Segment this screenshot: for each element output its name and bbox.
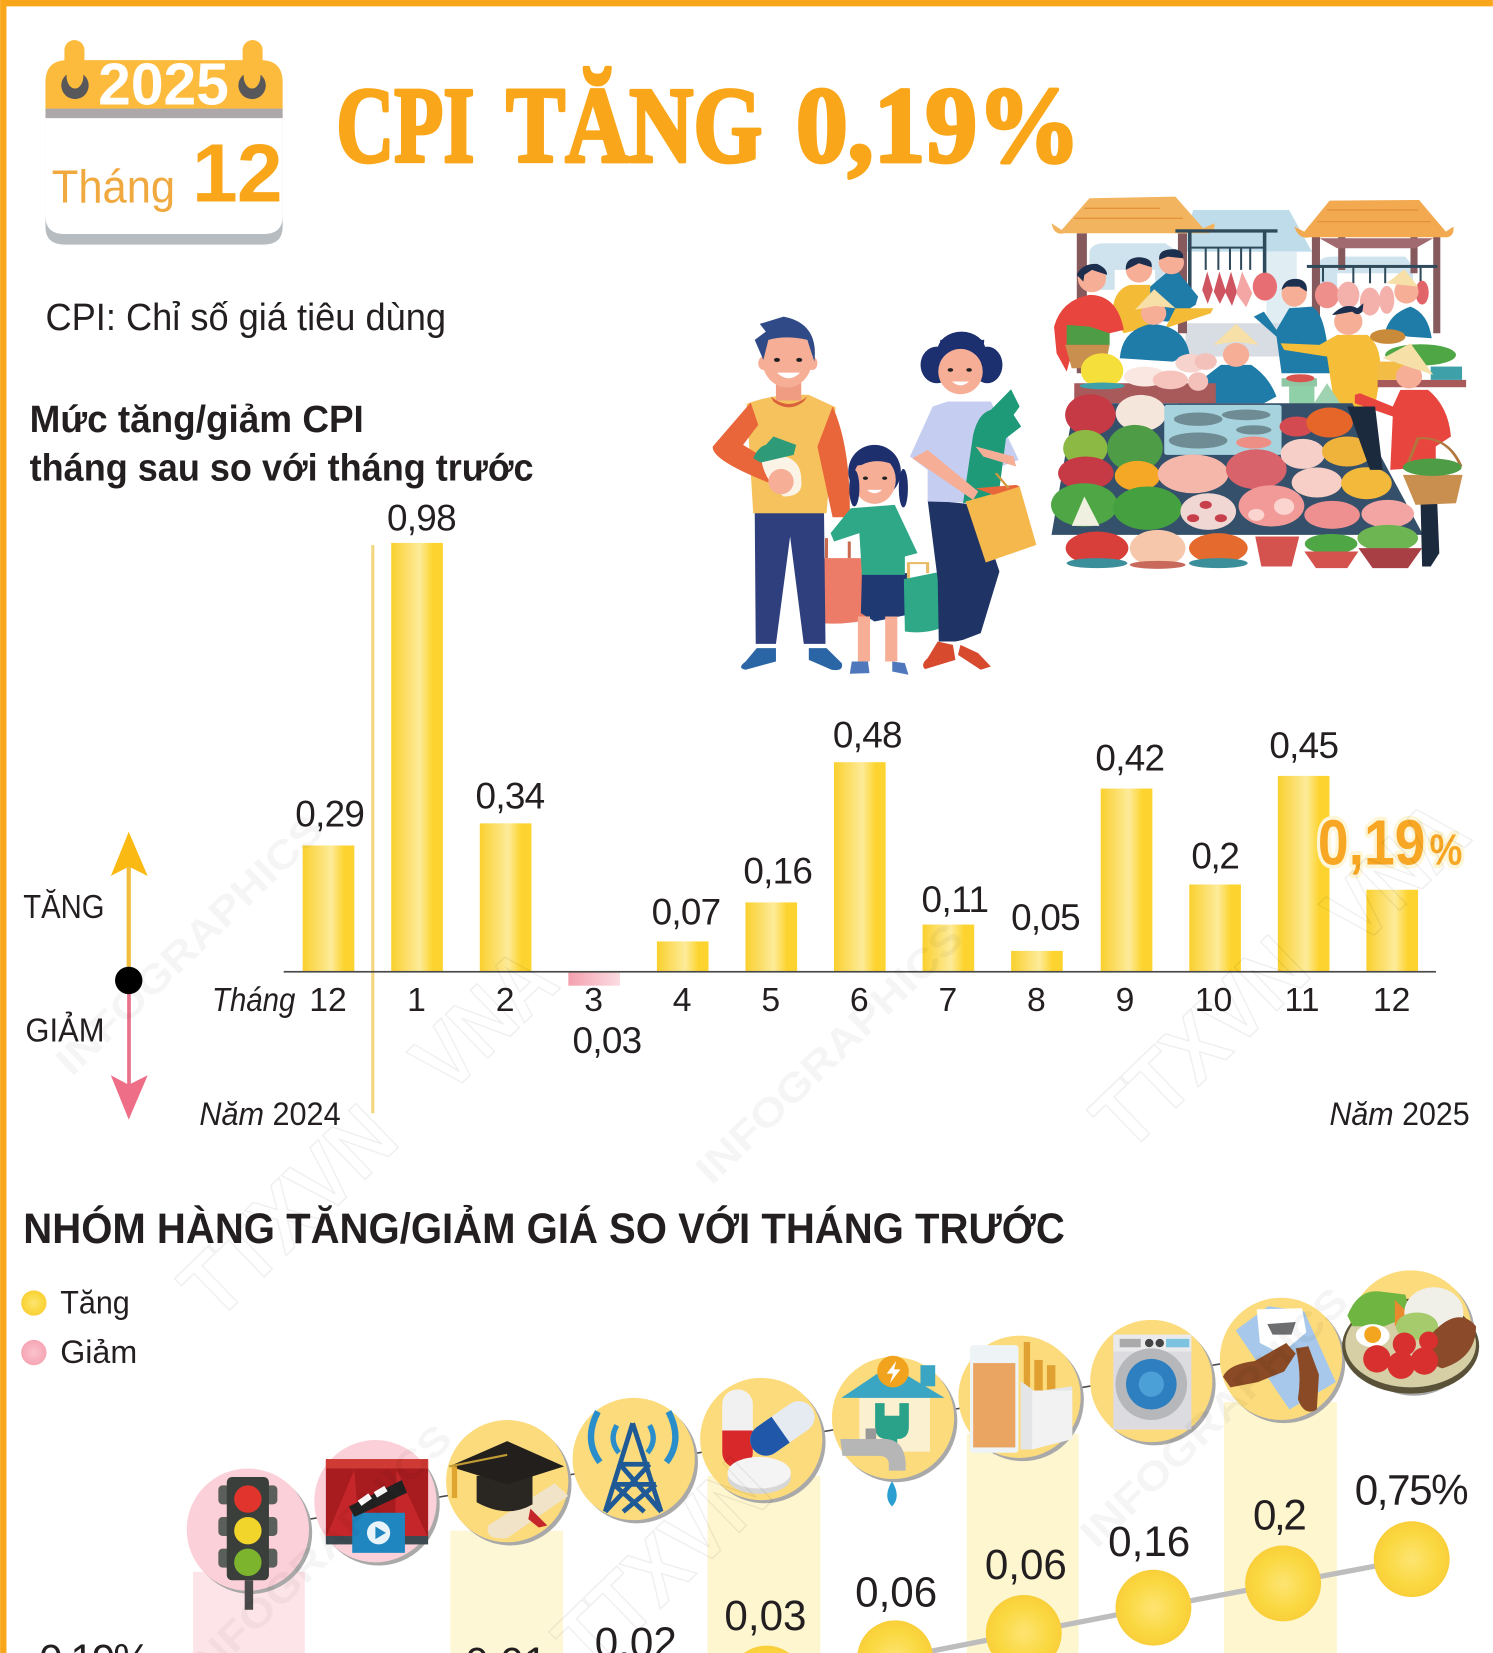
axis caption: Tháng	[212, 981, 296, 1019]
value labels: 0,98	[387, 497, 457, 538]
icon: telecom	[573, 1398, 698, 1523]
fresh food table	[1051, 394, 1414, 530]
value dots	[729, 1521, 1450, 1653]
value labels: 0,05	[1011, 897, 1081, 938]
legend: Giảm	[60, 1333, 137, 1370]
value labels: 0,34	[476, 776, 545, 817]
watermarks: INFOGRAPHICS	[1072, 1279, 1357, 1556]
highlighted December value: %	[1430, 826, 1462, 874]
chart heading: tháng sau so với tháng trước	[30, 448, 534, 490]
bars	[303, 543, 1418, 972]
icon: drinks and tobacco	[958, 1336, 1084, 1461]
year 2025 label: Năm 2025	[1329, 1095, 1470, 1132]
child	[831, 445, 918, 675]
arrow: up / down legend	[23, 832, 148, 1120]
month axis labels: 1	[407, 981, 426, 1019]
month axis labels: 3	[584, 981, 603, 1019]
illustration: family shopping	[713, 317, 1036, 675]
icon: clothing and footwear	[1220, 1298, 1345, 1423]
month axis labels: 4	[673, 981, 692, 1019]
background columns	[193, 1402, 1337, 1653]
calendar year: 2025	[98, 51, 229, 117]
icon: housing and utilities	[832, 1356, 957, 1506]
value labels: 0,2	[1253, 1492, 1307, 1539]
legend: Tăng	[60, 1284, 130, 1321]
value trend line	[767, 1559, 1412, 1653]
value labels: 0,29	[295, 794, 365, 835]
month axis labels: 8	[1027, 981, 1046, 1019]
month axis labels	[309, 981, 1410, 1019]
watermarks: TTXVN	[161, 1086, 415, 1337]
value labels: 0,75%	[1355, 1466, 1469, 1513]
market front baskets	[1066, 525, 1422, 569]
calendar month label: Tháng	[52, 160, 175, 212]
market vendors	[1054, 249, 1432, 407]
chart heading: Mức tăng/giảm CPI	[30, 399, 364, 441]
month axis labels: 10	[1195, 981, 1232, 1019]
value labels: 0,16	[1108, 1518, 1190, 1565]
icon: food and catering	[1342, 1270, 1479, 1396]
value labels: 0,07	[652, 892, 721, 933]
month axis labels: 11	[1285, 981, 1320, 1019]
icon: traffic	[187, 1469, 312, 1610]
icon: household appliances	[1090, 1320, 1216, 1445]
value labels: 0,2	[1191, 836, 1240, 877]
month axis labels: 2	[496, 981, 514, 1019]
woman	[928, 500, 999, 641]
highlighted December value: 0,19	[1318, 806, 1425, 878]
illustration: market stall	[1051, 197, 1466, 569]
goods group chart	[39, 1270, 1479, 1653]
value labels: 0,11	[921, 879, 989, 920]
icon connector line	[248, 1331, 1411, 1530]
year 2024 label: Năm 2024	[199, 1095, 341, 1132]
watermarks: INFOGRAPHICS	[687, 915, 972, 1192]
value labels: 0,06	[985, 1541, 1067, 1588]
month axis labels: 7	[938, 981, 957, 1019]
value labels: 0,48	[833, 714, 903, 755]
value labels: 0,16	[743, 850, 813, 891]
title: 0,19%	[796, 65, 1081, 185]
month axis labels: 6	[850, 981, 869, 1019]
bar chart: monthly CPI	[199, 497, 1470, 1132]
up label: TĂNG	[23, 888, 104, 926]
icon: medicine	[700, 1378, 826, 1503]
month axis labels: 12	[309, 981, 347, 1019]
value labels: 0,45	[1269, 725, 1339, 766]
calendar month number: 12	[192, 128, 283, 219]
value labels: 0,42	[1095, 738, 1165, 779]
icon: education	[446, 1420, 572, 1545]
month axis labels: 12	[1373, 981, 1410, 1019]
month axis labels: 5	[761, 981, 780, 1019]
section heading: NHÓM HÀNG TĂNG/GIẢM GIÁ SO VỚI THÁNG TRƯỚC	[23, 1204, 1065, 1252]
CPI definition: CPI: Chỉ số giá tiêu dùng	[45, 297, 446, 339]
watermarks: INFOGRAPHICS	[47, 807, 332, 1084]
value labels: 0,03	[573, 1020, 642, 1061]
title: TĂNG	[506, 65, 762, 185]
value labels	[295, 497, 1339, 1061]
negative bar	[568, 972, 620, 986]
legend	[21, 1284, 137, 1370]
watermarks: TTXVN	[1073, 917, 1327, 1168]
value labels: 0,06	[855, 1569, 937, 1616]
woman with basket	[1347, 343, 1463, 567]
watermarks	[47, 781, 1487, 1653]
year divider	[371, 545, 374, 1113]
icon: entertainment	[314, 1440, 440, 1566]
value labels	[39, 1466, 1469, 1653]
month axis labels: 9	[1116, 981, 1134, 1019]
watermarks: VNA	[393, 929, 575, 1110]
chart heading	[30, 399, 534, 490]
down label: GIẢM	[25, 1012, 104, 1050]
title: CPI	[336, 65, 475, 185]
value labels: 0,03	[724, 1592, 807, 1639]
calendar icon	[45, 40, 283, 245]
